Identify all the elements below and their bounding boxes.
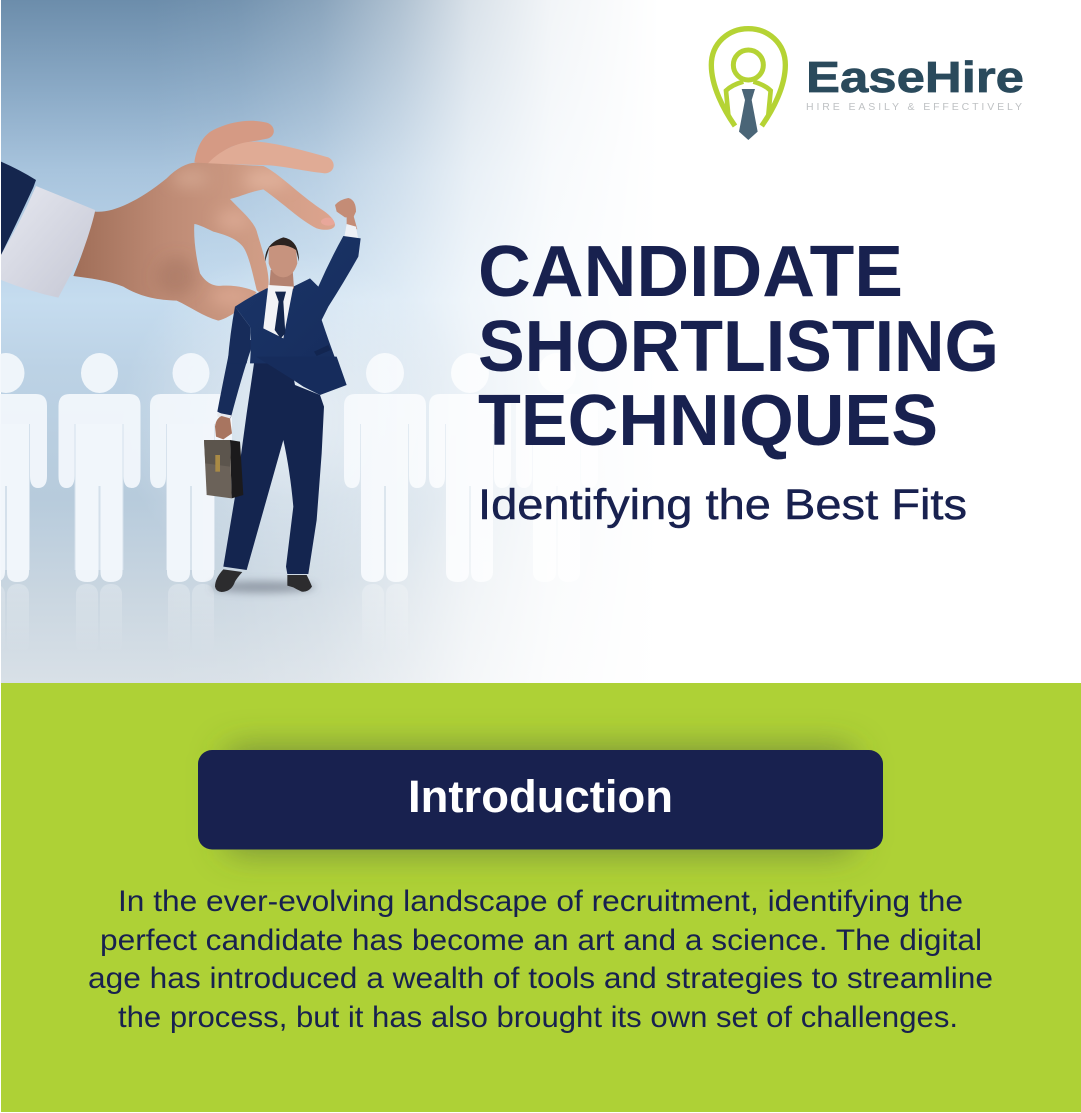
hand holding case [215, 416, 232, 439]
right shoe [287, 575, 312, 592]
floor shadow [211, 581, 315, 593]
shirt cuff [1, 186, 95, 298]
hand and thumb [74, 162, 335, 320]
green background [1, 683, 1081, 1112]
illustration: giant hand [1, 121, 343, 327]
jacket pocket [314, 345, 331, 356]
illustration: businessman [204, 198, 361, 593]
title: TECHNIQUES [478, 381, 938, 461]
heading: Introduction [408, 771, 673, 822]
trousers [223, 357, 324, 574]
white fade overlay [1, 0, 1081, 683]
silhouettes of candidates [0, 353, 598, 654]
title: SHORTLISTING [478, 307, 999, 387]
face [269, 245, 297, 277]
icon: pin with person and tie [711, 29, 785, 140]
hero photo background [1, 0, 1081, 683]
heading button [198, 750, 883, 850]
raised fist [335, 198, 357, 229]
panel: introduction [1, 683, 1081, 1112]
body text: age has introduced a wealth of tools and strategies to streamline [88, 962, 993, 995]
left shoe [215, 569, 242, 592]
raised cuff [344, 224, 358, 240]
subtitle: Identifying the Best Fits [478, 481, 967, 529]
jacket [235, 236, 361, 363]
body text: perfect candidate has become an art and a science. The digital [100, 924, 982, 957]
title [478, 232, 999, 461]
shirt [263, 285, 293, 338]
necktie [275, 292, 286, 338]
left sleeve [217, 340, 255, 418]
body text [88, 885, 993, 1034]
logo: EaseHire [711, 29, 1024, 140]
heading button shadow [225, 748, 855, 852]
sleeve cuff [217, 413, 231, 419]
body text: the process, but it has also brought its own set of challenges. [118, 1001, 958, 1034]
left sleeve upper [228, 307, 250, 363]
briefcase [204, 440, 243, 498]
jacket sleeve [1, 162, 36, 255]
upper finger [194, 121, 274, 165]
jacket hem [256, 345, 347, 395]
upper body [228, 198, 361, 363]
hair [265, 237, 299, 262]
title: CANDIDATE [478, 232, 903, 312]
brand name: EaseHire [806, 53, 1024, 102]
tagline: HIRE EASILY & EFFECTIVELY [806, 101, 1022, 113]
middle finger [207, 142, 334, 173]
neck [269, 270, 294, 293]
body text: In the ever-evolving landscape of recruitment, identifying the [118, 885, 963, 918]
lower body [204, 340, 324, 592]
